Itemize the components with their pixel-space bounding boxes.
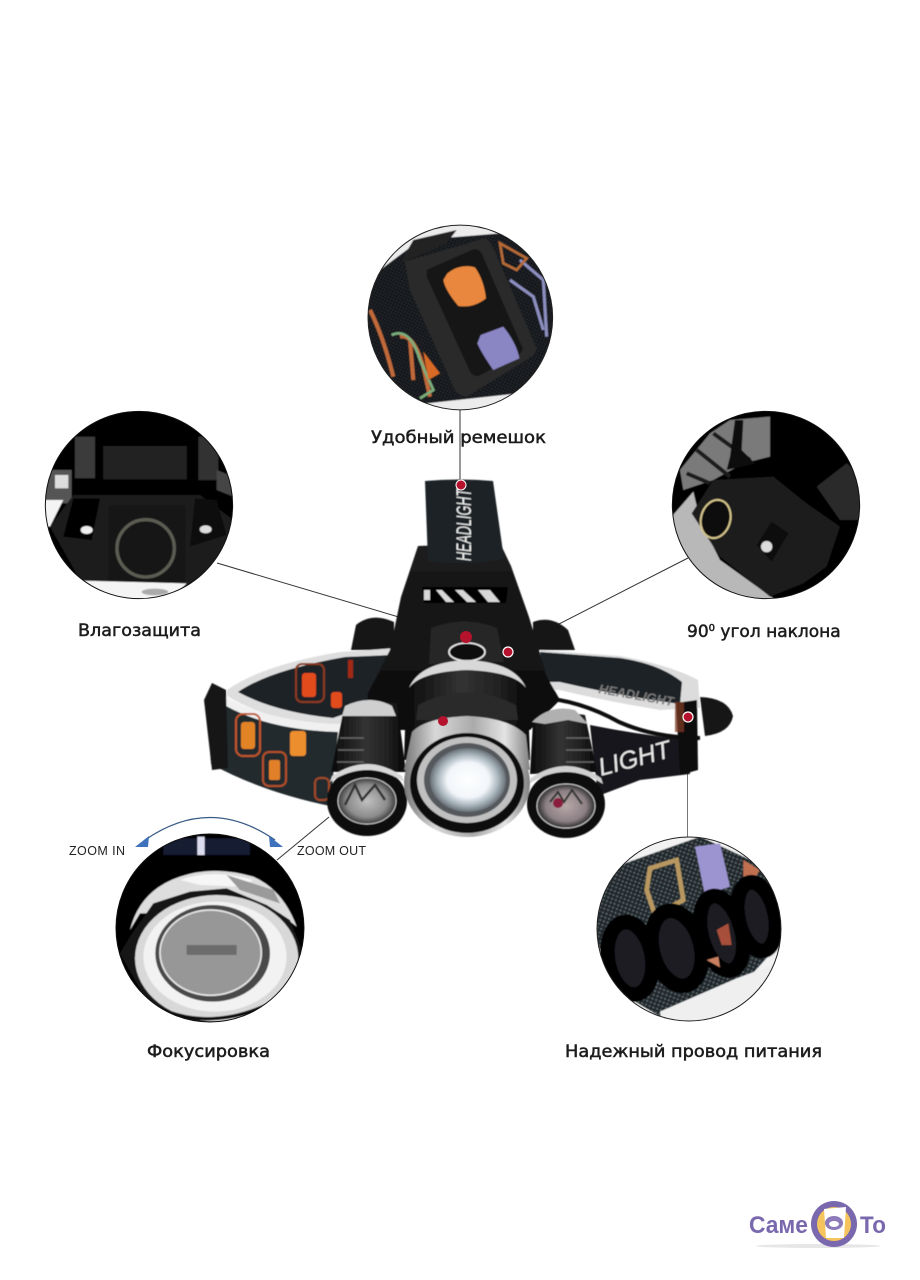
label: tilt angle: угол наклона (715, 622, 841, 642)
orange squares on back strap (296, 660, 353, 708)
label: moisture protection: Влагозащита (78, 621, 201, 640)
black body (366, 543, 560, 730)
panel: moisture protection closeup (44, 410, 234, 600)
panel: strap buckle closeup (368, 224, 554, 410)
top strap (425, 480, 504, 563)
logo: CameToTo: Саме (749, 1212, 808, 1239)
right strap lettering: LIGHT (595, 735, 675, 782)
label: tilt angle: 90 (687, 622, 709, 642)
front left strap (208, 697, 340, 806)
right back of head strap (540, 650, 700, 710)
panel: 90 degree tilt closeup (672, 410, 860, 600)
label: focus: Фокусировка (147, 1042, 270, 1061)
label: power cable: Надежный провод питания (565, 1042, 822, 1061)
headlight print on back strap: HEADLIGHT (597, 681, 676, 709)
label: zoom out: ZOOM OUT (297, 844, 366, 858)
front right strap (590, 725, 690, 796)
label: strap: Удобный ремешок (371, 428, 546, 447)
panel: focus lens closeup (116, 834, 304, 1022)
right buckle (676, 700, 698, 775)
left lamp head (327, 700, 407, 836)
cable (536, 697, 700, 738)
headlamp product photo (204, 480, 733, 838)
red marker dots (438, 480, 693, 726)
orange squares on left strap (236, 714, 329, 800)
left buckle (204, 683, 228, 770)
logo: CameToTo: То (860, 1212, 886, 1239)
leader lines (217, 410, 688, 860)
left back of head strap (227, 648, 395, 726)
logo: CameToTo (749, 1201, 886, 1248)
right cord loop (700, 697, 733, 736)
button panel (429, 622, 504, 664)
right lamp head (527, 708, 605, 838)
power button (449, 643, 485, 661)
label: tilt angle: 0 (709, 623, 715, 634)
rear bumps behind the body (351, 618, 575, 650)
headlight lettering on top strap: HEADLIGHT (453, 488, 476, 561)
infographic: headlamp features (44, 224, 886, 1248)
zoom direction arrows (135, 818, 283, 847)
main lamp head (404, 660, 530, 837)
panel: power cable closeup (596, 836, 782, 1022)
vent slots (422, 587, 508, 603)
label: zoom in: ZOOM IN (69, 844, 125, 858)
